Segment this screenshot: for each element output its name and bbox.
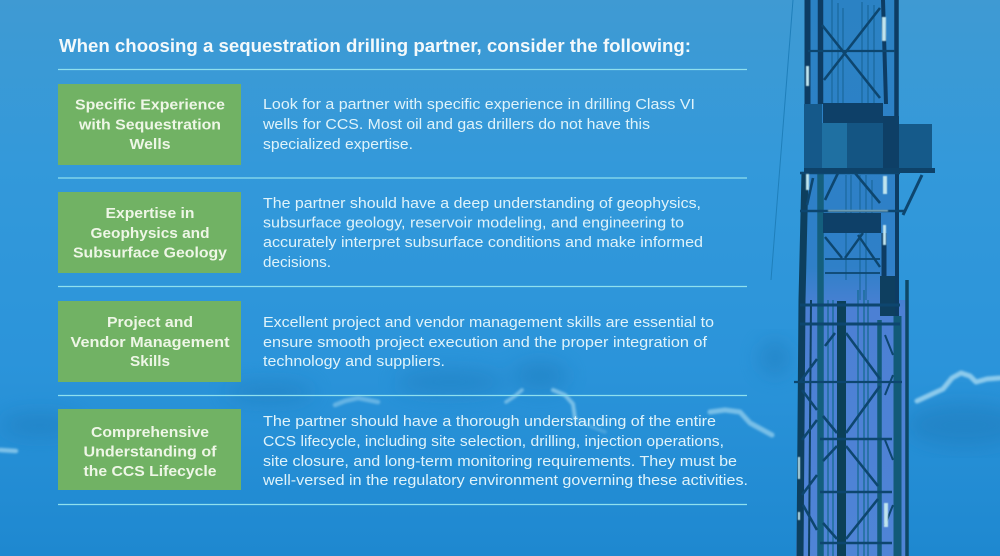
tower cabin bbox=[804, 103, 935, 233]
row 4 description: well-versed in the regulatory environment governing these activities. bbox=[262, 473, 748, 489]
tower dark block bbox=[880, 276, 895, 316]
row 2 description bbox=[263, 196, 703, 271]
row 3 label box: Vendor Management bbox=[70, 334, 230, 351]
row 4 label box: Understanding of bbox=[84, 444, 218, 460]
illustration: drilling rig tower bbox=[771, 0, 935, 556]
row 4: CCS lifecycle bbox=[58, 409, 748, 490]
row 1 description: specialized expertise. bbox=[263, 137, 413, 153]
row 2 label box: Subsurface Geology bbox=[73, 244, 228, 262]
row 1 description: Look for a partner with specific experience in drilling Class VI bbox=[263, 97, 695, 113]
row 4 description bbox=[262, 414, 748, 489]
row 3: project and vendor management bbox=[58, 301, 714, 382]
title: When choosing a sequestration drilling partner, consider the following: bbox=[59, 36, 691, 56]
row 2 description: accurately interpret subsurface conditions and make informed bbox=[263, 235, 703, 251]
row 4 label box bbox=[58, 409, 241, 490]
row 1 description: wells for CCS. Most oil and gas drillers do not have this bbox=[262, 117, 650, 133]
row 2 description: decisions. bbox=[263, 255, 331, 271]
row 2: geophysics expertise bbox=[58, 192, 703, 273]
clouds: white contrails bbox=[0, 373, 1000, 451]
row 1: specific experience bbox=[58, 84, 695, 165]
row 3 description: ensure smooth project execution and the proper integration of bbox=[263, 335, 708, 351]
row 1 label box bbox=[58, 84, 241, 165]
row 3 label box: Project and bbox=[107, 314, 193, 331]
row 3 label box: Skills bbox=[130, 353, 170, 370]
row 3 label box bbox=[58, 301, 241, 382]
row 1 label box: Wells bbox=[130, 136, 170, 153]
row 2 description: The partner should have a deep understanding of geophysics, bbox=[263, 196, 701, 212]
divider lines bbox=[58, 70, 747, 504]
row 2 label box: Expertise in bbox=[106, 205, 194, 222]
row 4 label box: the CCS Lifecycle bbox=[84, 463, 216, 480]
row 4 description: CCS lifecycle, including site selection, drilling, injection operations, bbox=[263, 434, 724, 450]
tower bright lights bbox=[798, 17, 888, 527]
row 4 description: The partner should have a thorough understanding of the entire bbox=[263, 414, 716, 430]
guy wire bbox=[771, 0, 793, 280]
row 2 label box bbox=[58, 192, 241, 273]
row 1 description bbox=[262, 97, 695, 153]
row 2 description: subsurface geology, reservoir modeling, and engineering to bbox=[263, 216, 684, 232]
row 2 label box: Geophysics and bbox=[90, 225, 210, 242]
row 3 description: technology and suppliers. bbox=[263, 354, 445, 370]
row 4 label box: Comprehensive bbox=[91, 424, 209, 441]
row 4 description: site closure, and long-term monitoring requirements. They must be bbox=[263, 454, 737, 470]
row 3 description bbox=[263, 315, 714, 370]
row 1 label box: Specific Experience bbox=[75, 96, 225, 114]
row 1 label box: with Sequestration bbox=[78, 116, 221, 134]
tower columns bbox=[800, 0, 907, 556]
tower interior bbox=[796, 0, 908, 556]
tower cross braces bbox=[794, 8, 922, 543]
row 3 description: Excellent project and vendor management skills are essential to bbox=[263, 315, 714, 331]
